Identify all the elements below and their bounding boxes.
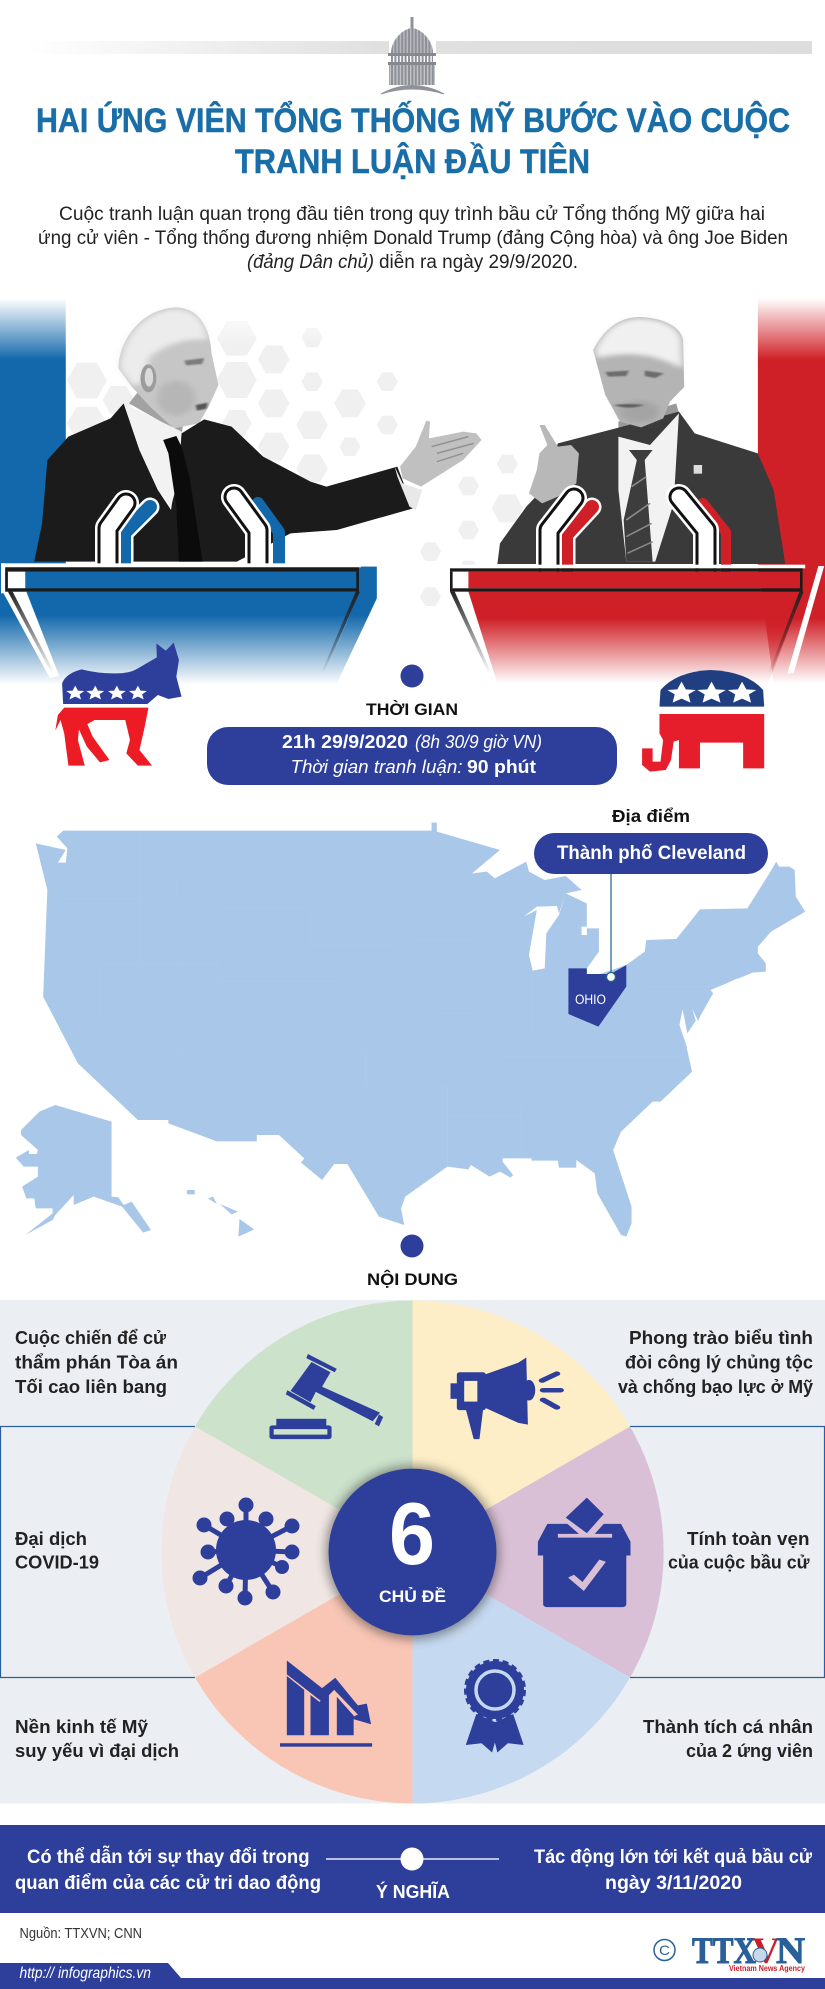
- Hawaii: [187, 1190, 254, 1237]
- red side strip: [758, 298, 825, 565]
- Alaska: [16, 1105, 151, 1235]
- wheel sectors: [161, 1300, 664, 1804]
- label: OHIO: OHIO: [575, 992, 606, 1007]
- icon: ballot box: [538, 1498, 631, 1607]
- heading: Ý NGHĨA: Ý NGHĨA: [376, 1881, 450, 1902]
- topic label: Supreme Court: thẩm phán Tòa án: [15, 1352, 178, 1372]
- intro text: (đảng Dân chủ): [247, 252, 374, 273]
- callout: Cleveland location: [534, 833, 768, 982]
- topic label: achievements: của 2 ứng viên: [686, 1740, 813, 1761]
- intro text: [38, 204, 788, 273]
- microphones: Biden podium: [108, 497, 279, 572]
- topic label: Supreme Court: Cuộc chiến để cử: [15, 1327, 167, 1348]
- footer band: http:// infographics.vn: [20, 1965, 151, 1982]
- figure: Biden: [34, 307, 482, 562]
- topic label: election integrity: [668, 1528, 810, 1572]
- icon: Republican elephant: [642, 670, 764, 772]
- topic label: economy: [15, 1716, 179, 1761]
- faint state borders: [63, 831, 716, 1167]
- title: [36, 101, 790, 181]
- icon: medal: [466, 1661, 524, 1753]
- podium: blue: [0, 563, 377, 683]
- heading: NỘI DUNG: NỘI DUNG: [367, 1270, 458, 1289]
- Chesapeake Bay: [679, 1008, 698, 1048]
- pill: time details: [207, 727, 617, 785]
- icon: gavel: [269, 1354, 383, 1439]
- topic label: election integrity: của cuộc bầu cử: [668, 1552, 810, 1572]
- logo: TTXVN: V: [752, 1931, 780, 1972]
- topic label: Supreme Court: [15, 1327, 178, 1397]
- blue side strip: [0, 298, 66, 565]
- icon: capitol dome: [381, 17, 444, 94]
- topic label: economy: Nền kinh tế Mỹ: [15, 1716, 149, 1737]
- panel: significance: [0, 1825, 825, 1913]
- icon: megaphone: [451, 1357, 561, 1439]
- logo: TTXVN: C: [659, 1942, 670, 1958]
- Long Island Sound: [712, 979, 741, 991]
- intro text: ứng cử viên - Tổng thống đương nhiệm Donald Trump (đảng Cộng hòa) và ông Joe Biden: [38, 228, 788, 249]
- topic label: Supreme Court: Tối cao liên bang: [15, 1376, 167, 1397]
- significance text left: Có thể dẫn tới sự thay đổi trong: [27, 1844, 310, 1868]
- timeline dot: time: [400, 664, 424, 688]
- centre badge: 6 topics: CHỦ ĐỀ: [379, 1587, 446, 1606]
- topic label: economy: suy yếu vì đại dịch: [15, 1740, 179, 1761]
- pill: time details: (8h 30/9 giờ VN): [415, 731, 542, 752]
- centre badge: 6 topics: 6: [389, 1484, 435, 1583]
- Lake Michigan: [524, 894, 566, 971]
- significance text right: ngày 3/11/2020: [605, 1872, 742, 1894]
- heading: Địa điểm: Địa điểm: [612, 806, 690, 826]
- map: United States: [16, 823, 805, 1237]
- significance text right: [534, 1846, 813, 1894]
- capitol header bar: [26, 17, 812, 94]
- topic label: protests: và chống bạo lực ở Mỹ: [618, 1376, 814, 1397]
- pill: time details: Thời gian tranh luận:: [290, 756, 462, 777]
- hexagon background pattern: [66, 303, 523, 606]
- icon: Democratic donkey: [55, 643, 182, 766]
- pill: time details: 90 phút: [467, 756, 536, 777]
- logo: TTXVN: TTX: [692, 1931, 756, 1972]
- source note: Nguồn: TTXVN; CNN: [20, 1925, 142, 1942]
- callout: Cleveland location: Thành phố Cleveland: [557, 842, 746, 864]
- topic label: protests: [618, 1327, 814, 1397]
- icon: falling chart: [280, 1661, 372, 1747]
- microphones: Trump podium: [549, 497, 726, 572]
- icon: virus: [192, 1498, 300, 1606]
- topic label: COVID-19: Đại dịch: [15, 1528, 87, 1549]
- significance text left: quan điểm của các cử tri dao động: [15, 1872, 321, 1894]
- topic label: protests: đòi công lý chủng tộc: [625, 1352, 813, 1372]
- topic label: COVID-19: [15, 1528, 99, 1572]
- topic label: achievements: Thành tích cá nhân: [643, 1716, 813, 1737]
- topic label: protests: Phong trào biểu tình: [629, 1327, 813, 1348]
- Ohio highlight: [568, 965, 626, 1027]
- hero: debate illustration: [0, 298, 825, 606]
- logo: TTXVN: N: [776, 1931, 805, 1972]
- title: TRANH LUẬN ĐẦU TIÊN: [235, 143, 590, 181]
- figure: Trump: [497, 317, 785, 564]
- pill: time details: 21h 29/9/2020: [282, 731, 408, 752]
- topic label: COVID-19: COVID-19: [15, 1552, 99, 1572]
- footer band: [0, 1963, 825, 1989]
- logo: TTXVN: [654, 1931, 805, 1973]
- significance text right: Tác động lớn tới kết quả bầu cử: [534, 1846, 813, 1868]
- contiguous states: [36, 823, 805, 1237]
- heading: THỜI GIAN: THỜI GIAN: [366, 700, 458, 719]
- centre badge: 6 topics: [326, 1466, 500, 1640]
- significance text left: [15, 1844, 321, 1894]
- podium: red: [447, 565, 825, 683]
- topic label: election integrity: Tính toàn vẹn: [687, 1528, 810, 1549]
- topic label: achievements: [643, 1716, 813, 1761]
- logo: TTXVN: Vietnam News Agency: [729, 1964, 805, 1973]
- significance connector: [326, 1848, 499, 1870]
- intro text: Cuộc tranh luận quan trọng đầu tiên trong quy trình bầu cử Tổng thống Mỹ giữa hai: [59, 204, 765, 225]
- panel: six topics: [0, 1300, 825, 1804]
- intro text: diễn ra ngày 29/9/2020.: [379, 251, 578, 273]
- timeline dot: content: [400, 1234, 424, 1258]
